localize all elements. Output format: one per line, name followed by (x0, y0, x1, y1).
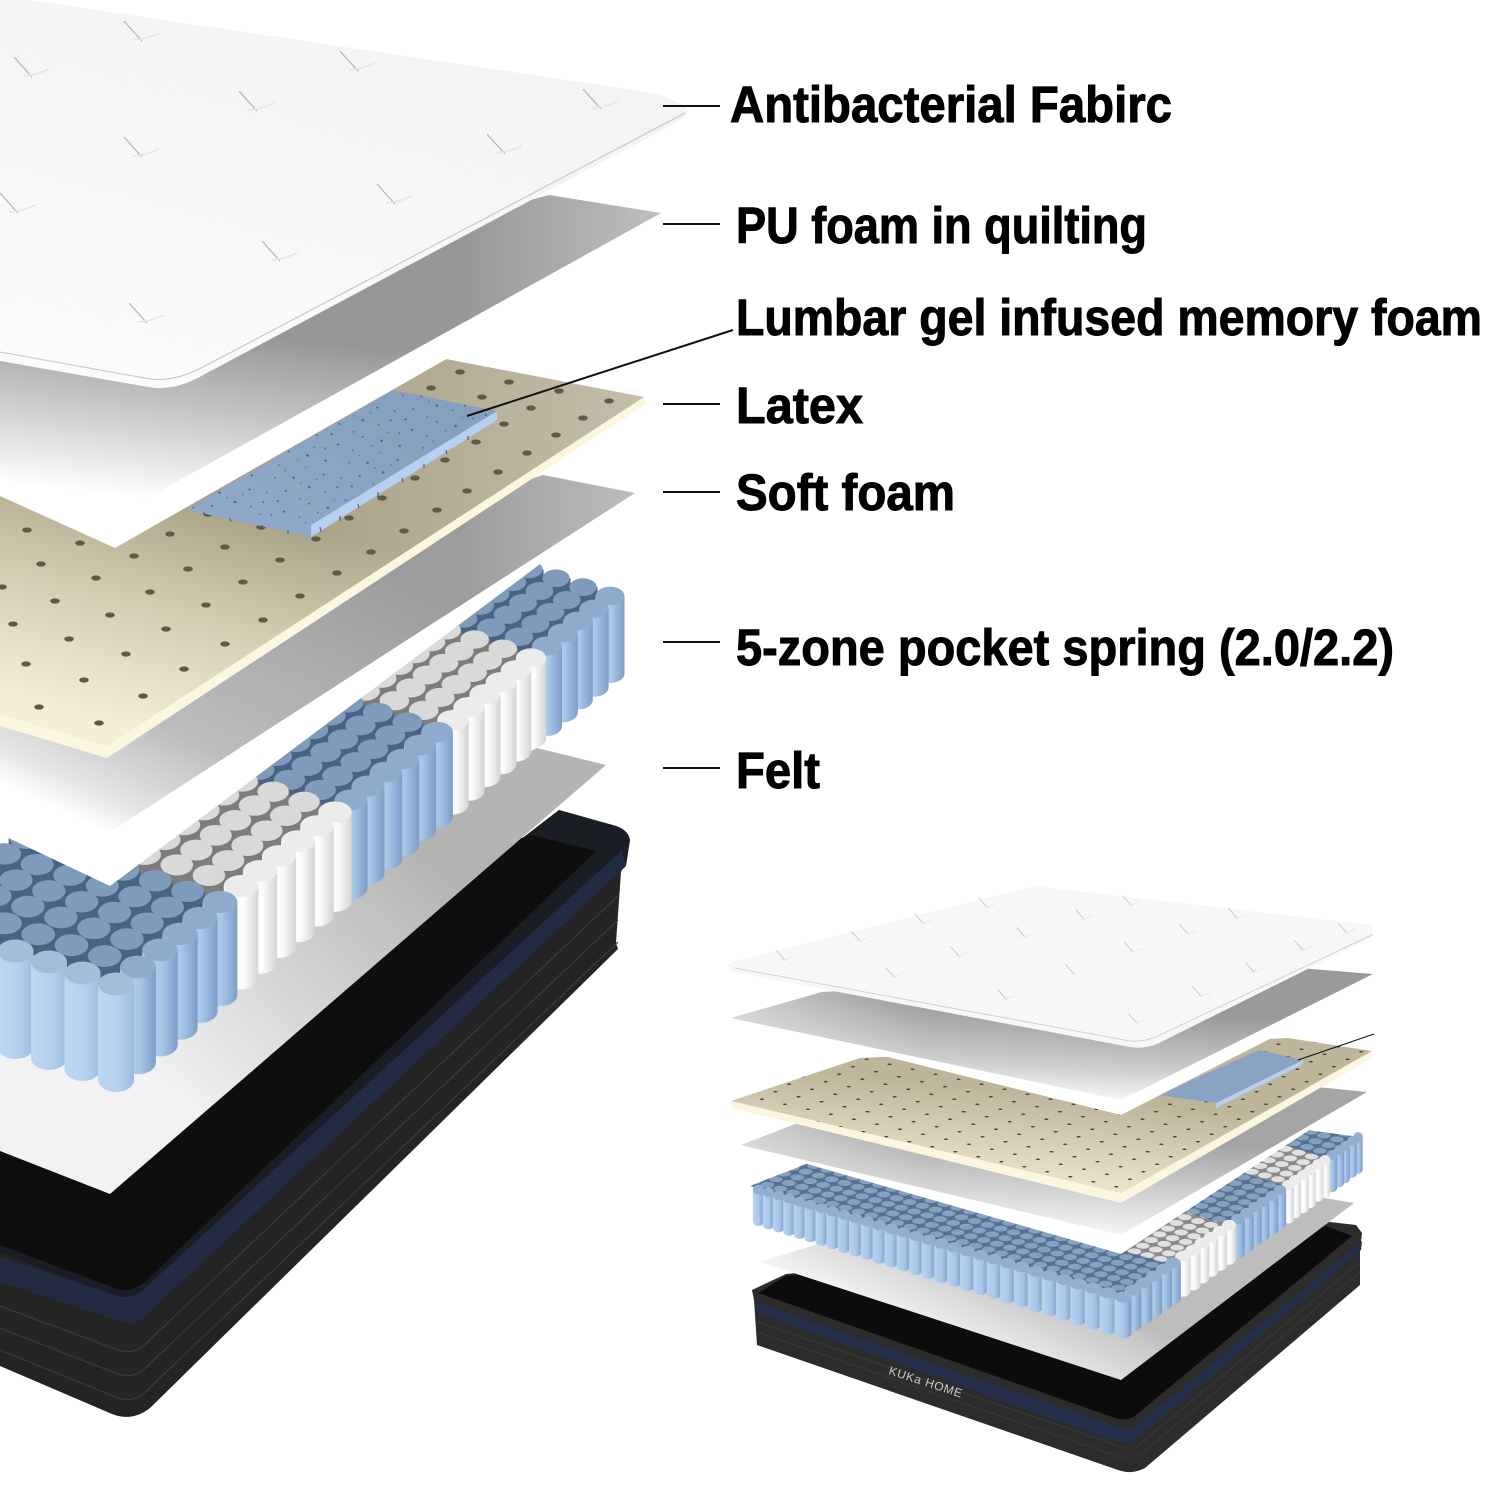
brand label: KUKa HOME (887, 1364, 965, 1401)
label: PU foam in quilting: PU foam in quilting (736, 197, 1147, 254)
small gel pad (1159, 1050, 1303, 1108)
small PU foam layer (731, 968, 1373, 1115)
label: Antibacterial Fabirc: Antibacterial Fabirc (730, 76, 1172, 133)
small felt layer (760, 1197, 1354, 1380)
small pocket spring block (750, 1070, 1363, 1338)
felt layer (0, 748, 606, 1194)
panel: small complete mattress (727, 886, 1380, 1472)
label: 5-zone pocket spring: 5-zone pocket spring (2.0/2.2) (736, 619, 1394, 676)
mattress base frame (0, 810, 630, 1417)
PU foam layer (0, 190, 661, 548)
small mattress base (752, 1222, 1362, 1472)
antibacterial fabric layer (0, 0, 689, 388)
label: Lumbar gel infused memory foam (467, 289, 1482, 416)
soft foam layer (0, 475, 635, 886)
lumbar gel memory foam pad (189, 390, 497, 537)
small latex layer (731, 1038, 1372, 1203)
small callout line (1298, 1034, 1374, 1060)
label: Felt: Felt (736, 742, 820, 799)
small fabric layer (727, 886, 1380, 1048)
panel: main exploded mattress (0, 0, 689, 1417)
latex layer (0, 300, 646, 758)
label: Soft foam: Soft foam (736, 464, 955, 521)
small soft foam layer (741, 1085, 1367, 1254)
5-zone pocket springs (0, 534, 625, 1092)
label: Latex: Latex (736, 377, 863, 434)
